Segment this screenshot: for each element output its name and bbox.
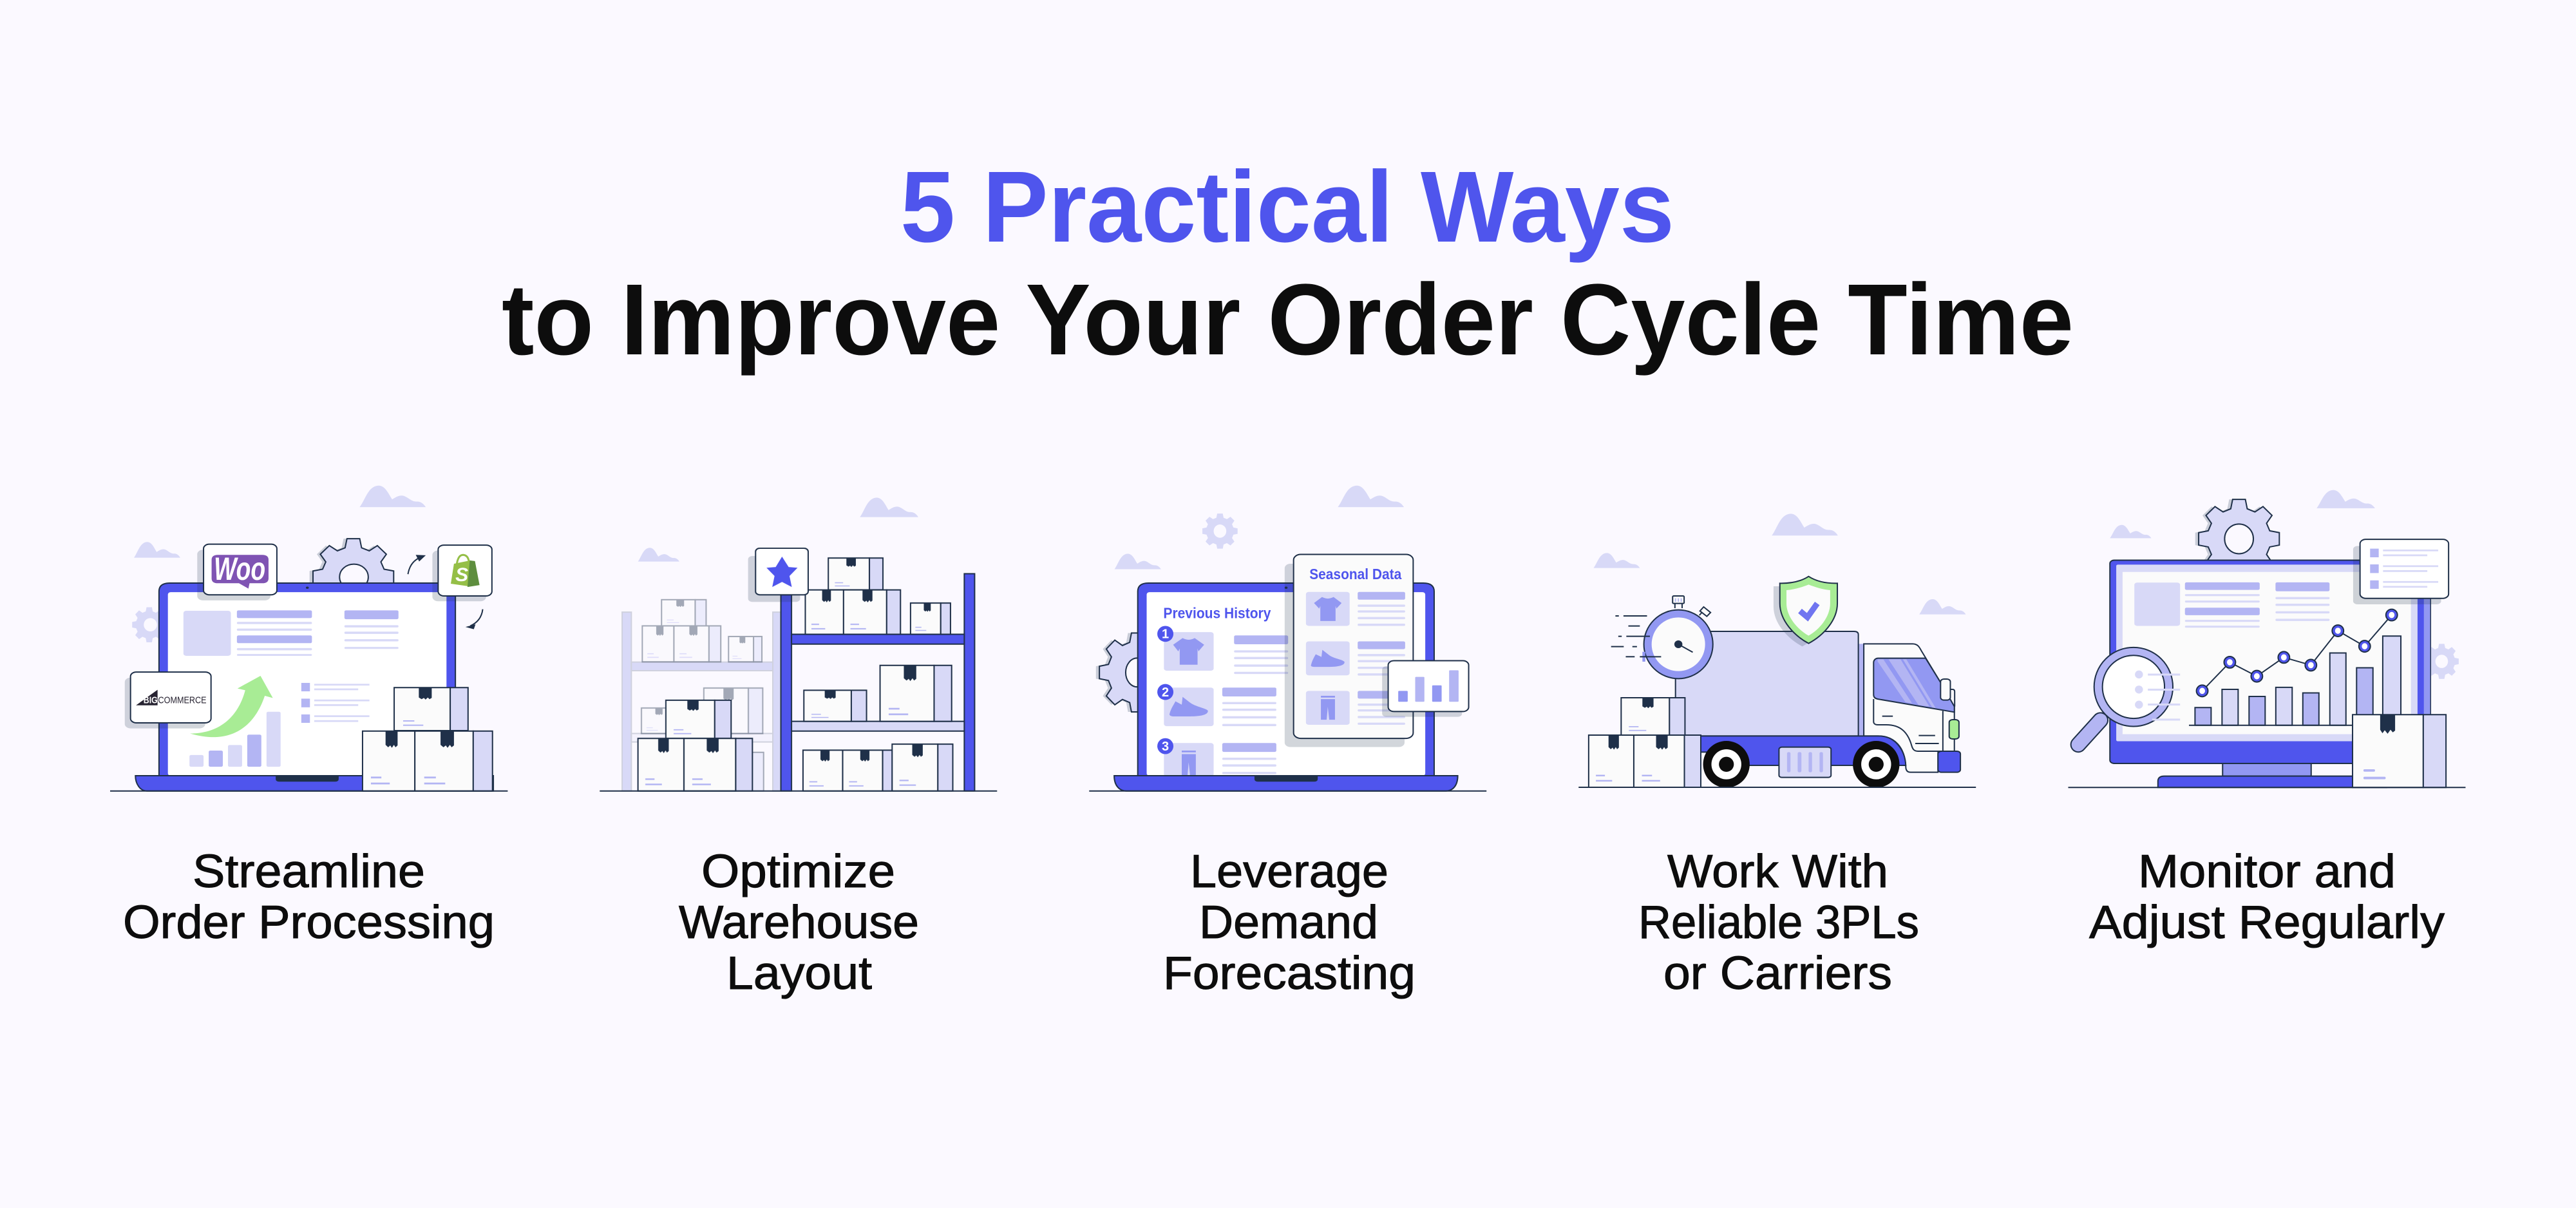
illustration: warehouse shelves: [600, 497, 997, 791]
truck cargo box: [1676, 631, 1864, 736]
truck chassis: [1701, 736, 1906, 765]
screen: previous history list: [1163, 604, 1288, 776]
illustration: monitoring dashboard: [2069, 490, 2465, 787]
numbered badges: 1: [1162, 628, 1169, 642]
label: optimize warehouse layout: Layout: [726, 948, 872, 999]
laptop base: [1114, 776, 1458, 791]
green growth arrow: [190, 676, 273, 737]
card: star rating: [748, 548, 808, 602]
background clouds: [1593, 513, 1966, 615]
bottom shelf parcels: [803, 744, 952, 791]
bar chart: [2189, 636, 2401, 725]
bar chart: [189, 712, 281, 767]
faded gear: [2425, 644, 2459, 679]
monitor: [2110, 560, 2430, 787]
floating list card: [2353, 539, 2448, 604]
label: optimize warehouse layout: [679, 846, 919, 999]
background clouds: [2110, 490, 2375, 538]
front parcels stack: [638, 700, 752, 791]
parcel: [2353, 714, 2446, 787]
blue shelf frame: [781, 573, 974, 791]
gear behind laptop: [310, 539, 393, 615]
label: leverage demand forecasting: Leverage: [1190, 846, 1388, 897]
label: optimize warehouse layout: Warehouse: [679, 897, 919, 948]
stopwatch: [1642, 596, 1713, 678]
numbered badges: 2: [1162, 685, 1169, 700]
screen: previous history list: Previous History: [1163, 604, 1271, 621]
mirror, light and bumper: [1938, 679, 1960, 772]
card: shopify logo: [432, 545, 492, 601]
background clouds: [638, 497, 918, 562]
card: woo logo: [197, 544, 277, 600]
speed lines: [1611, 616, 1661, 657]
card: seasonal data: [1285, 555, 1413, 747]
numbered badges: 3: [1162, 740, 1169, 754]
background clouds: [1115, 486, 1404, 570]
label: leverage demand forecasting: [1163, 846, 1416, 999]
card: seasonal data: Seasonal Data: [1309, 566, 1401, 582]
gear behind laptop: [1096, 633, 1175, 712]
label: work with reliable 3pls or carriers: Work With: [1667, 846, 1888, 897]
laptop: [135, 583, 493, 791]
faded background shelf: [622, 600, 781, 791]
gear on monitor: [2195, 499, 2279, 579]
title: [502, 151, 2074, 376]
parcels: [1589, 698, 1701, 787]
label: streamline order processing: [123, 846, 495, 948]
label: monitor and adjust regularly: [2089, 846, 2445, 948]
label: streamline order processing: Order Processing: [123, 897, 495, 948]
illustration: delivery truck: [1578, 513, 1976, 788]
card: woo logo: Woo: [214, 551, 265, 587]
stacked parcels: [363, 687, 493, 791]
title: to Improve Your Order Cycle Time: [502, 264, 2074, 376]
magnifying glass: [2078, 647, 2173, 745]
line chart: [2197, 609, 2398, 696]
label: work with reliable 3pls or carriers: [1638, 846, 1919, 999]
numbered badges: [1157, 626, 1173, 754]
sync arrows: [408, 555, 483, 629]
truck wheels: [1703, 741, 1899, 788]
card: bigcommerce logo: COMMERCE: [158, 696, 207, 706]
card: shopify logo: S: [455, 564, 468, 586]
truck cab: [1864, 644, 1955, 772]
label: leverage demand forecasting: Demand: [1199, 897, 1378, 948]
label: streamline order processing: Streamline: [193, 846, 425, 897]
illustration: demand forecasting: [1089, 486, 1486, 791]
label: leverage demand forecasting: Forecasting: [1163, 948, 1416, 999]
faded gear: [1202, 513, 1238, 549]
card: bigcommerce logo: BIG: [144, 696, 158, 706]
laptop: [1138, 583, 1434, 777]
dotted list under lens: [2135, 671, 2180, 721]
card: small bar chart: [1382, 661, 1469, 717]
faded gear: [132, 607, 166, 642]
list on screen: [301, 683, 370, 723]
shield with check: [1774, 577, 1837, 646]
middle shelf parcels: [804, 666, 952, 722]
card: bigcommerce logo: [125, 672, 211, 729]
screen content blocks: [184, 610, 399, 656]
fuel tank: [1779, 747, 1831, 778]
top shelf parcels: [805, 558, 951, 635]
background clouds: [134, 486, 426, 558]
title: 5 Practical Ways: [900, 151, 1674, 264]
label: work with reliable 3pls or carriers: Reliable 3PLs: [1638, 897, 1919, 948]
screen content blocks: [2134, 582, 2329, 628]
label: monitor and adjust regularly: Adjust Regularly: [2089, 897, 2445, 948]
label: optimize warehouse layout: Optimize: [701, 846, 895, 897]
illustration: streamline order processing: [110, 486, 507, 791]
label: monitor and adjust regularly: Monitor and: [2138, 846, 2396, 897]
label: work with reliable 3pls or carriers: or Carriers: [1663, 948, 1892, 999]
